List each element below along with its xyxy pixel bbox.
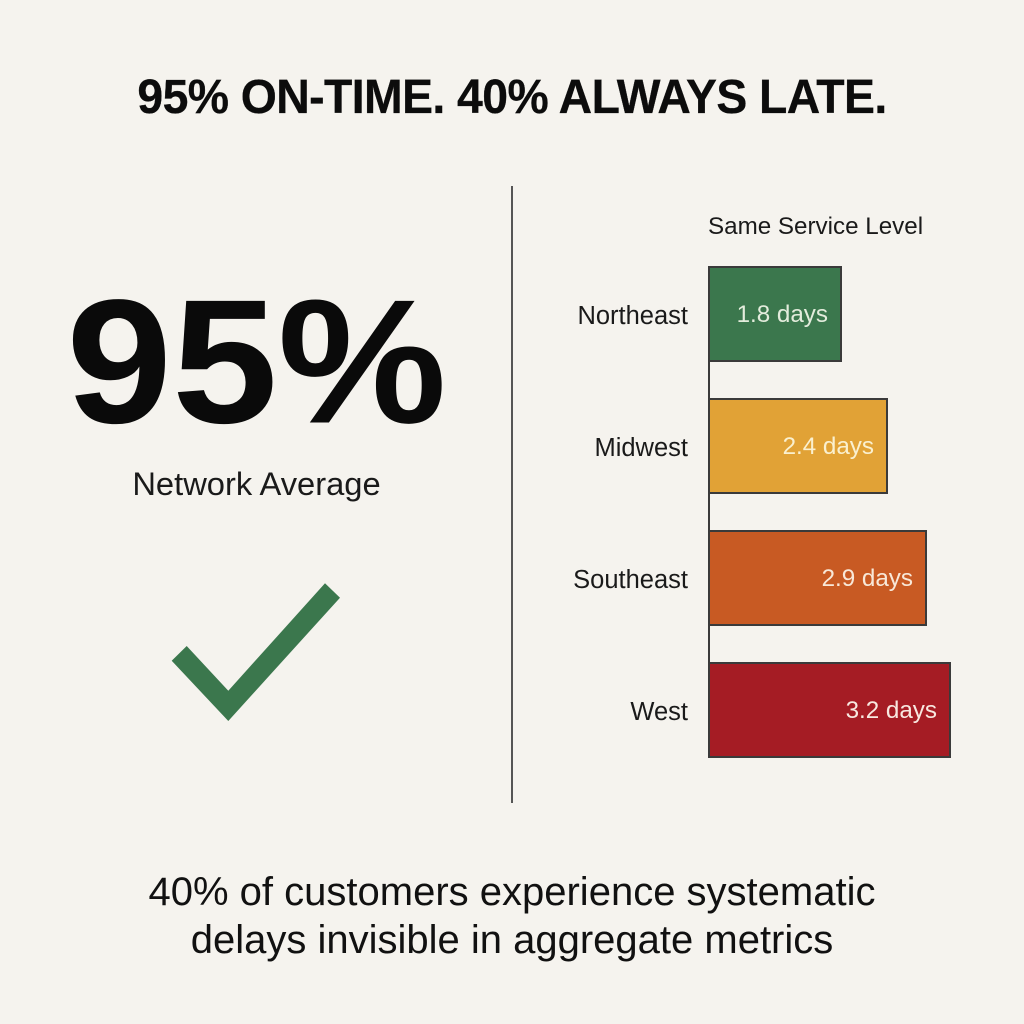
chart axis [708,266,710,758]
bar: Northeast [708,266,842,362]
bar: West: 3.2 days [846,697,937,724]
stat label: Network Average [132,465,381,502]
label: Midwest: Midwest [594,434,688,462]
bar: Northeast: 1.8 days [737,301,828,328]
bar: West [708,662,951,758]
bottom takeaway text: delays invisible in aggregate metrics [191,918,833,962]
panel: regional bar chart [573,213,951,758]
bar: Midwest [708,398,888,494]
bar: Midwest: 2.4 days [783,433,874,460]
bar: Southeast: 2.9 days [822,565,913,592]
big stat: 95%: 95% [66,263,447,461]
vertical divider [511,186,513,803]
label: Southeast: Southeast [573,566,688,594]
label: West: West [630,698,688,726]
bar: Southeast [708,530,927,626]
label: Northeast: Northeast [577,302,688,330]
bottom takeaway text [148,870,875,962]
icon: check mark [172,583,340,721]
title: 95% ON-TIME. 40% ALWAYS LATE. [137,71,887,124]
chart heading: Same Service Level [708,213,923,240]
bottom takeaway text: 40% of customers experience systematic [148,870,875,914]
